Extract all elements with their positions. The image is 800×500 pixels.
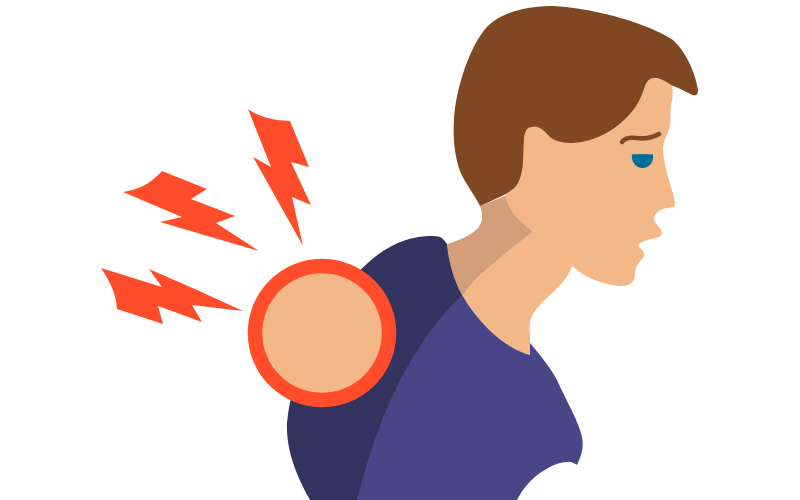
front of shirt [357, 295, 583, 500]
pain bolts [101, 109, 311, 324]
bolt: middle [123, 171, 259, 251]
hair [454, 6, 698, 206]
neck shadow [447, 196, 533, 295]
neck and face skin [462, 78, 675, 355]
sore shoulder circle [255, 266, 389, 400]
bolt: bottom [101, 268, 243, 324]
back of shirt [287, 236, 470, 500]
eyebrow [622, 134, 659, 142]
eye [632, 154, 653, 168]
bolt: top [248, 109, 311, 246]
